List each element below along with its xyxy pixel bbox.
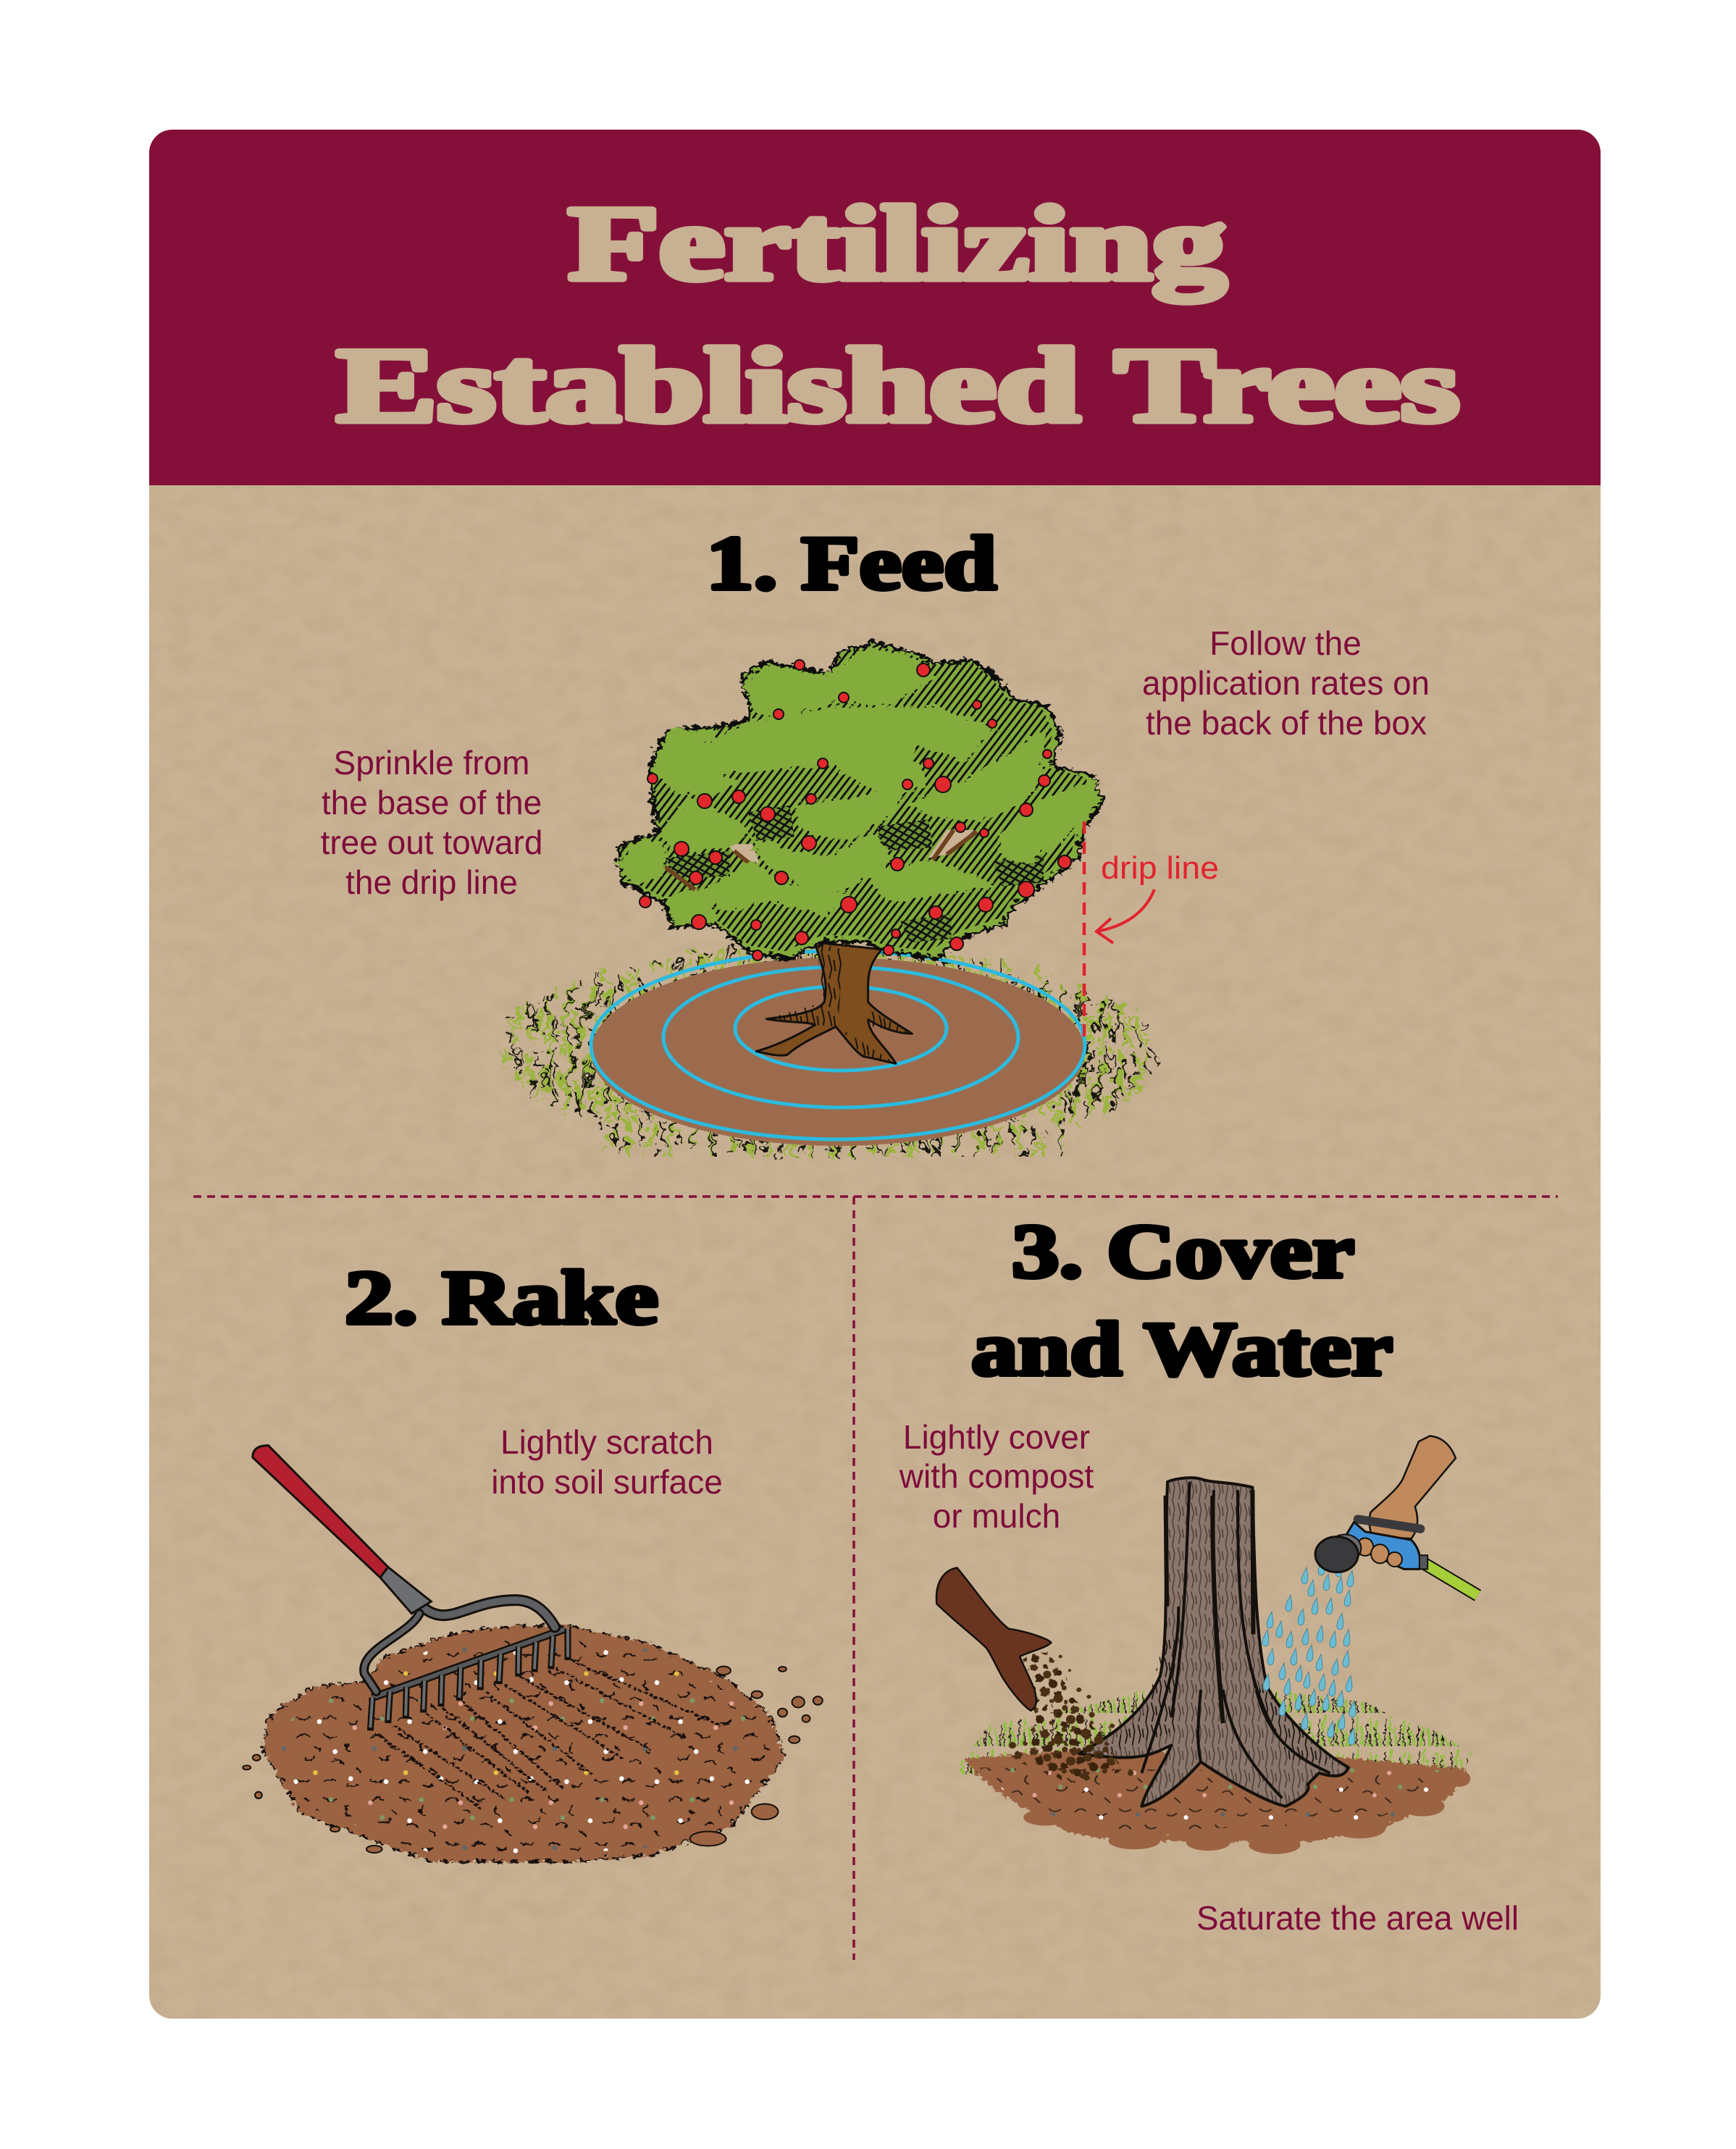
grass tufts — [957, 1690, 1470, 1773]
water drops placed in page units — [1262, 1546, 1356, 1745]
text: scratch instructions: Lightly scratch — [500, 1423, 713, 1461]
hose — [1425, 1564, 1477, 1596]
text: sprinkle instructions: tree out toward — [321, 824, 542, 861]
drip line marker — [1084, 821, 1154, 1042]
section dividers — [193, 1197, 1558, 1960]
text: scratch instructions: into soil surface — [491, 1463, 723, 1501]
hatched shade — [618, 644, 1094, 951]
text: scratch instructions — [491, 1423, 723, 1501]
rake ferrule — [380, 1567, 431, 1614]
heading: 3. Cover and Water — [971, 1209, 1393, 1391]
heading: 3. Cover and Water: and Water — [971, 1307, 1393, 1391]
text: application rates: the back of the box — [1146, 704, 1427, 742]
text: compost instructions: with compost — [899, 1457, 1094, 1495]
rake bow — [364, 1600, 555, 1691]
soil mound — [960, 1748, 1470, 1854]
text: compost instructions: Lightly cover — [903, 1418, 1090, 1456]
rake handle — [253, 1446, 388, 1578]
soil circle — [591, 958, 1085, 1146]
lit leaf clumps — [616, 648, 1094, 918]
soil pile — [261, 1624, 782, 1860]
text: application rates: Follow the — [1209, 624, 1362, 662]
title — [337, 185, 1459, 444]
arrow to drip line — [1096, 889, 1154, 943]
hand with spray nozzle — [1315, 1436, 1456, 1572]
crosshatched shadows and branches — [665, 805, 1044, 942]
foliage — [614, 640, 1099, 956]
title: Established Trees — [337, 327, 1459, 444]
trunk and roots — [756, 942, 912, 1063]
apples — [640, 660, 1071, 960]
text: application rates: application rates on — [1142, 664, 1430, 702]
text: sprinkle instructions — [321, 744, 542, 901]
illustration: rake in soil — [243, 1446, 823, 1860]
text: saturate: Saturate the area well — [1196, 1899, 1519, 1937]
text: sprinkle instructions: the base of the — [322, 784, 542, 821]
heading: 3. Cover and Water: 3. Cover — [1012, 1209, 1354, 1294]
rake head — [370, 1628, 568, 1730]
gloved hand — [936, 1567, 1051, 1711]
trunk — [1079, 1478, 1349, 1806]
heading: 2. Rake: 2. Rake — [345, 1255, 658, 1340]
text: compost instructions: or mulch — [933, 1497, 1060, 1535]
text: application rates — [1142, 624, 1430, 742]
illustration: tree with fertilizer rings — [495, 640, 1153, 1153]
text: sprinkle instructions: Sprinkle from — [334, 744, 529, 782]
label: drip line: drip line — [1101, 850, 1219, 886]
grass foreground — [594, 1112, 1079, 1153]
grass ring — [495, 942, 1153, 1153]
text: sprinkle instructions: the drip line — [345, 863, 518, 901]
poster card — [149, 130, 1601, 2019]
fertilizer rings — [591, 951, 1085, 1139]
illustration: covering and watering tree — [936, 1436, 1477, 1854]
loose clods — [243, 1667, 823, 1853]
title: Fertilizing — [569, 185, 1226, 302]
furrows — [374, 1660, 720, 1807]
mulch falling — [1009, 1651, 1133, 1783]
heading: 1. Feed: 1. Feed — [706, 521, 997, 606]
text: compost instructions — [899, 1418, 1094, 1535]
header band — [149, 130, 1601, 485]
